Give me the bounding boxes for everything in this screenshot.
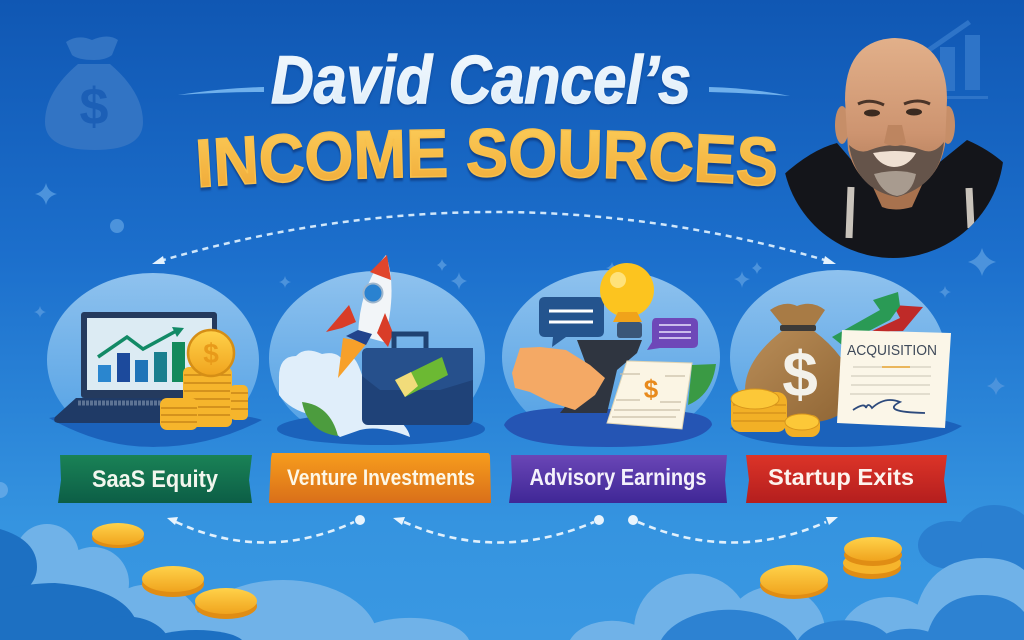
icon: cloud <box>279 350 410 437</box>
icon: dark cuff <box>560 340 642 413</box>
icon: faint money bag <box>45 36 143 150</box>
illustration circle <box>730 270 946 444</box>
panel: SaaS Equity <box>47 273 262 447</box>
coin 2 <box>142 566 204 597</box>
icon: money bag: $ <box>782 338 818 410</box>
icon: rocket <box>326 255 393 378</box>
base shadow <box>730 413 962 447</box>
base shadow <box>277 413 485 445</box>
label: Venture Investments <box>269 453 491 503</box>
label: Startup Exits <box>746 455 947 503</box>
icon: leaf <box>302 402 338 436</box>
heading: INCOME SOURCES: INCOME SOURCES <box>197 128 776 192</box>
icon: briefcase <box>362 334 473 425</box>
label: SaaS Equity: SaaS Equity <box>92 466 219 493</box>
coin stack <box>843 537 902 579</box>
label: Startup Exits: Startup Exits <box>768 464 914 490</box>
arrow: top dashed arc <box>152 212 836 264</box>
coin 3 <box>195 588 257 619</box>
heading: David Cancel's: David Cancel’s <box>271 42 691 118</box>
beard <box>849 142 944 197</box>
icon: coin stack: $ <box>203 338 219 369</box>
icon: laptop <box>54 312 217 423</box>
panel: Venture Investments <box>269 255 485 445</box>
icon: coin stack <box>160 330 248 430</box>
arrow: lower right <box>628 515 838 542</box>
icon: small speech bubble <box>647 318 698 350</box>
icon: faint bar chart <box>926 20 988 99</box>
sparkles <box>0 183 1005 498</box>
clouds <box>0 505 1024 640</box>
icon: acquisition document: ACQUISITION <box>847 342 937 359</box>
head <box>845 38 947 197</box>
icon: invoice <box>607 361 692 429</box>
label: Advisory Earnings <box>509 455 727 503</box>
icon: growth arrows <box>832 292 923 345</box>
coin 4 <box>760 565 828 599</box>
panel: Advisory Earnings <box>502 263 720 447</box>
label: SaaS Equity <box>58 455 252 503</box>
icon: money bag <box>745 304 852 423</box>
nose <box>884 125 906 146</box>
icon: acquisition document <box>837 330 951 428</box>
illustration circle <box>502 270 720 444</box>
coin 1 <box>92 523 144 548</box>
portrait <box>780 38 1006 260</box>
title accent lines <box>178 87 790 96</box>
base shadow <box>49 412 262 447</box>
illustration circle <box>269 271 485 445</box>
hoodie strings <box>849 187 971 238</box>
hoodie <box>780 140 1006 260</box>
illustration circle <box>47 273 259 447</box>
smile <box>873 151 916 167</box>
icon: speech bubble <box>539 297 604 347</box>
icon: handshake <box>512 347 605 410</box>
eyes and brows <box>858 101 930 105</box>
ears <box>835 106 848 144</box>
icon: leaf <box>688 364 716 405</box>
title <box>197 42 776 192</box>
label: Advisory Earnings: Advisory Earnings <box>530 464 706 490</box>
decorative coins <box>92 523 902 619</box>
neck <box>872 185 922 210</box>
arrow: lower left <box>167 515 365 542</box>
icon: invoice: $ <box>644 374 659 404</box>
icon: light bulb <box>600 263 654 338</box>
icon: coins <box>731 389 820 437</box>
base shadow <box>504 408 712 447</box>
arrow: lower middle <box>393 515 604 542</box>
panel: Startup Exits <box>730 270 962 447</box>
label: Venture Investments: Venture Investments <box>287 465 475 490</box>
icon: faint money bag: $ <box>80 78 109 136</box>
